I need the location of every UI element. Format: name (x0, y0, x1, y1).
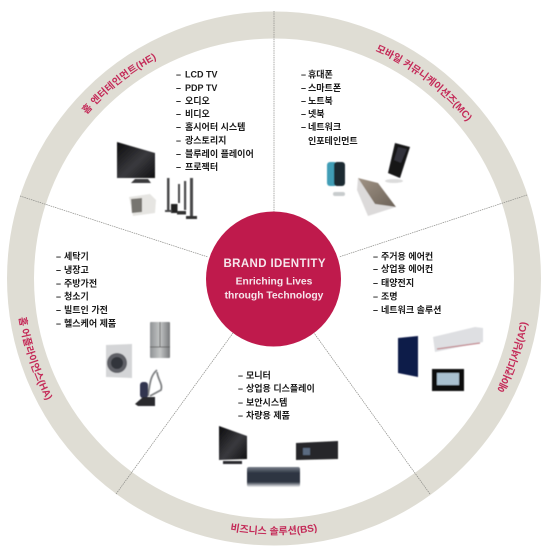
list: home appliance products: – (56, 252, 61, 262)
list: home entertainment products: – (176, 96, 181, 106)
list: air conditioning products: – (373, 292, 378, 302)
ring label: business solutions: 비즈니스 솔루션(BS) (231, 523, 317, 536)
list: home appliance products: 헬스케어 제품 (64, 318, 116, 328)
list: mobile products: 인포테인먼트 (308, 135, 358, 146)
list: home entertainment products: PDP TV (185, 83, 217, 93)
list: home entertainment products: 홈시어터 시스템 (185, 121, 245, 132)
list: home entertainment products: – (176, 83, 181, 93)
icon: laptop (357, 178, 396, 216)
icon: home theater speakers (165, 178, 197, 219)
icon: projector (129, 194, 156, 216)
list: home entertainment products: 광스토리지 (185, 134, 226, 146)
list: home entertainment products: – (176, 162, 181, 172)
list: home entertainment products: LCD TV (185, 70, 218, 80)
list: home entertainment products: – (176, 109, 181, 119)
list: home appliance products: 냉장고 (64, 264, 89, 275)
list: home appliance products: 빌트인 가전 (64, 304, 108, 315)
list: mobile products: – (301, 122, 306, 132)
list: mobile products: – (301, 96, 306, 106)
icon: set-top box (247, 467, 300, 487)
icon: solar panel (398, 336, 418, 377)
ring label: home entertainment: 홈 엔터테인먼트(HE) (81, 53, 156, 114)
list: mobile products: – (301, 70, 306, 80)
list: mobile products: 스마트폰 (308, 83, 341, 93)
icon: wall air conditioner (433, 327, 483, 352)
list: home appliance products: – (56, 318, 61, 328)
icon: vacuum cleaner (135, 370, 161, 406)
list: business products: 모니터 (246, 370, 271, 380)
list: air conditioning products: – (373, 252, 378, 262)
brand slogan: Enriching Lives (236, 276, 313, 288)
brand identity heading: BRAND IDENTITY (224, 258, 326, 270)
list: mobile products: – (301, 109, 306, 119)
ring label: air conditioning: 에어컨디셔닝(AC) (498, 322, 529, 392)
list: home entertainment products: 오디오 (185, 96, 210, 106)
center brand circle (206, 212, 341, 346)
list: business products: 상업용 디스플레이 (246, 382, 315, 394)
list: home entertainment products: 프로젝터 (185, 162, 218, 172)
list: home entertainment products: – (176, 70, 181, 80)
ring label: home appliance: 홈 어플라이언스(HA) (18, 317, 52, 400)
list: business products: 차량용 제품 (246, 410, 290, 420)
list: home entertainment products: – (176, 122, 181, 132)
list: air conditioning products: 네트워크 솔루션 (381, 304, 441, 315)
icon: car display unit (296, 441, 338, 460)
list: home appliance products: – (56, 265, 61, 275)
list: business products: – (238, 398, 243, 408)
icon: refrigerator (150, 322, 170, 358)
list: air conditioning products: – (373, 305, 378, 315)
list: air conditioning products: 태양전지 (381, 277, 414, 288)
list: home appliance products: 청소기 (64, 290, 89, 302)
list: air conditioning products: 주거용 에어컨 (381, 250, 433, 262)
list: home appliance products: 주방가전 (64, 278, 97, 288)
list: home appliance products: – (56, 305, 61, 315)
list: home entertainment products: 비디오 (185, 108, 210, 119)
list: home entertainment products: – (176, 149, 181, 159)
brand slogan: through Technology (225, 290, 324, 302)
icon: teal and dark phones (327, 162, 345, 196)
list: mobile products: 네트워크 (308, 121, 341, 132)
ring label: mobile communications: 모바일 커뮤니케이션즈(MC) (376, 44, 472, 122)
list: business products: – (238, 410, 243, 420)
list: mobile products: 노트북 (308, 96, 333, 106)
list: business products: – (238, 370, 243, 380)
icon: flat TV (117, 142, 155, 183)
icon: washing machine (106, 344, 132, 378)
list: air conditioning products: 상업용 에어컨 (381, 263, 433, 274)
list: air conditioning products: 조명 (381, 290, 398, 302)
icon: monitor (219, 426, 247, 464)
list: business products: 보안시스템 (246, 396, 287, 408)
list: mobile products: 휴대폰 (308, 68, 333, 80)
list: home appliance products: 세탁기 (64, 250, 89, 262)
list: business products: – (238, 384, 243, 394)
list: home entertainment products: 블루레이 플레이어 (185, 148, 254, 159)
list: home entertainment products: – (176, 136, 181, 146)
list: mobile products: 넷북 (308, 108, 325, 119)
list: air conditioning products: – (373, 278, 378, 288)
list: home appliance products: – (56, 278, 61, 288)
list: home appliance products: – (56, 292, 61, 302)
list: air conditioning products: – (373, 264, 378, 274)
list: mobile products: – (301, 83, 306, 93)
icon: smartphone (385, 143, 410, 183)
icon: control panel (432, 369, 464, 391)
